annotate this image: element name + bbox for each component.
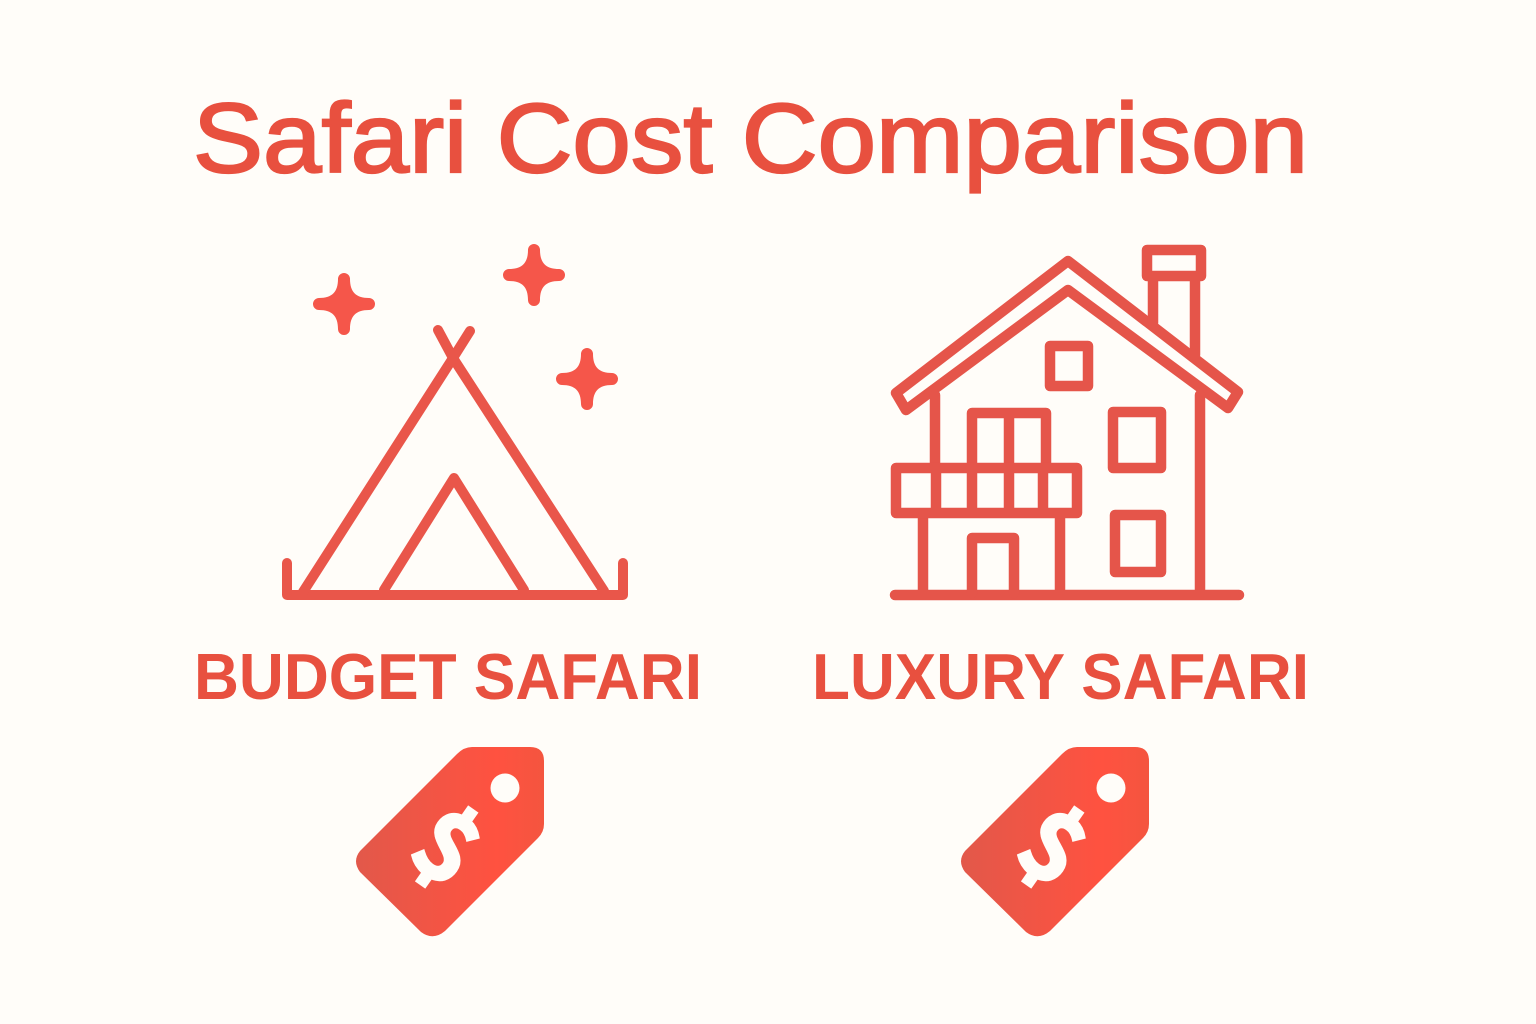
star 1 [313, 273, 375, 335]
right window upper [1113, 412, 1161, 468]
label: budget safari: BUDGET SAFARI [194, 640, 702, 713]
label: luxury safari: LUXURY SAFARI [812, 640, 1309, 713]
icon: luxury price tag: $ [996, 772, 1117, 912]
icon: budget price tag [356, 747, 544, 936]
right window lower [1115, 515, 1161, 572]
star 2 [503, 244, 565, 306]
balcony [896, 468, 1077, 513]
icon: luxury price tag [961, 747, 1149, 936]
tent outline [287, 330, 623, 595]
walls and ground [895, 395, 1239, 595]
attic window [1050, 346, 1088, 386]
icon: house [895, 250, 1239, 595]
door [972, 538, 1014, 593]
title: Safari Cost Comparison [193, 83, 1308, 193]
icon: budget price tag: $ [390, 772, 511, 912]
balcony window [972, 413, 1046, 465]
star 3 [556, 348, 618, 410]
roof [896, 261, 1238, 410]
chimney [1147, 250, 1201, 355]
icon: tent with stars [287, 244, 623, 595]
